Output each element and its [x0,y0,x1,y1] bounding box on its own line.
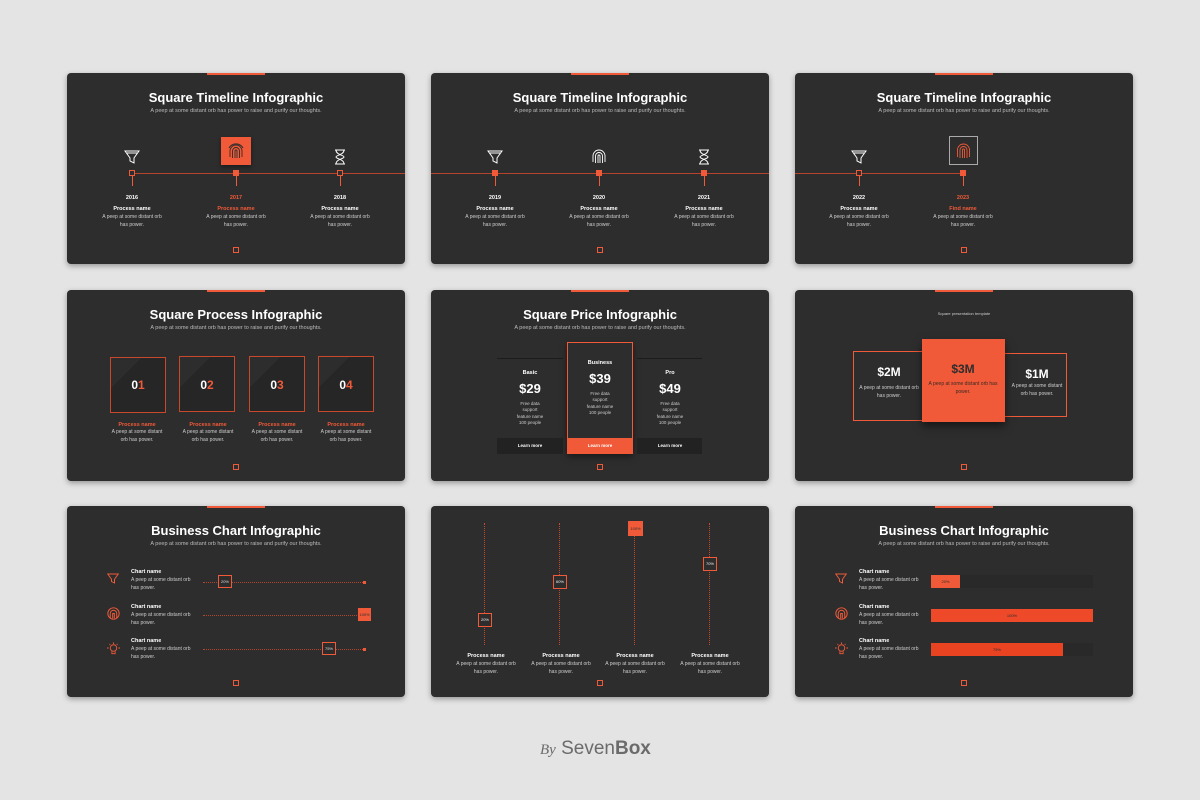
row 2 text: Chart name [859,604,889,610]
subtitle: A peep at some distant orb has power to raise and purify our thoughts. [514,108,686,114]
step 2021: has power. [692,222,716,228]
icon: funnel [487,150,503,164]
plan: basic: Learn more [518,443,542,448]
label 4: has power. [698,668,722,674]
marker 20%: 20% [221,579,229,584]
row 2 text: A peep at some distant orb [131,612,190,618]
label 2: Process name [189,422,227,428]
step 2023: Find name [949,206,977,212]
label 1: A peep at some distant orb [456,661,516,667]
box 03 [249,356,305,412]
step 2016: A peep at some distant orb [102,214,162,220]
step 2021: Process name [685,206,723,212]
step 2021: A peep at some distant orb [674,214,734,220]
label 4: orb has power. [330,436,362,442]
step 2023 [933,195,993,228]
step 2017 [206,195,266,228]
step 2020: has power. [587,222,611,228]
step 2018: 2018 [334,195,346,201]
icon: fingerprint [107,607,120,620]
slide: square price [431,290,769,481]
icon: funnel [107,574,119,584]
plan: basic [497,358,563,455]
icon: funnel [835,574,847,584]
row 1 text [859,569,918,590]
row 3 text: Chart name [131,638,161,644]
step 2016: 2016 [126,195,138,201]
title: Square Process Infographic [150,307,322,322]
label 2 [182,422,234,442]
box 04 [318,356,374,412]
bar 20%: 20% [941,579,950,584]
step 2017: 2017 [230,195,242,201]
label 3 [605,653,665,674]
plan: pro: Learn more [658,443,682,448]
row 2 text [131,604,190,626]
box 03: 03 [270,378,284,392]
box $2M: $2M [877,365,901,379]
box $1M: $1M [1025,367,1049,381]
marker 60%: 60% [556,579,564,584]
label 2: A peep at some distant [183,429,233,435]
box $3M highlighted: A peep at some distant orb has [929,381,997,387]
label 4: Process name [691,653,729,659]
subtitle: A peep at some distant orb has power to raise and purify our thoughts. [150,541,322,547]
box 04: 04 [339,378,353,392]
marker 60% [553,575,567,589]
slide: square values [795,290,1133,481]
box 01: 01 [131,378,145,392]
step 2017: Process name [217,206,255,212]
title: Square Timeline Infographic [877,90,1051,105]
slide: square timeline 3 [795,73,1133,264]
box $2M [853,351,923,421]
box $1M: orb has power. [1021,390,1053,396]
step 2017: A peep at some distant orb [206,214,266,220]
label 1 [112,422,162,442]
row 3 text: has power. [131,654,155,660]
plan: business: Learn more [588,443,612,448]
subtitle: A peep at some distant orb has power to raise and purify our thoughts. [878,541,1050,547]
step 2023: has power. [951,222,975,228]
step 2017: has power. [224,222,248,228]
step 2016: Process name [113,206,151,212]
label 4: A peep at some distant orb [680,661,740,667]
label 3: Process name [616,653,654,659]
marker 20%: 20% [481,617,489,622]
step 2021: 2021 [698,195,710,201]
row 3 text [859,638,918,660]
row 2 text: has power. [859,620,883,626]
label 1: A peep at some distant [112,429,162,435]
label 3: A peep at some distant orb [605,661,665,667]
row 3 text: A peep at some distant orb [859,646,918,652]
plan: basic: support [522,407,538,412]
marker 100% [628,521,643,536]
slide: square timeline 2 [431,73,769,264]
highlighted box: fingerprint [221,137,251,165]
step 2016: has power. [120,222,144,228]
plan: pro: feature name [657,414,683,419]
marker 100% [358,608,371,621]
row 1 text: Chart name [859,569,889,575]
step 2020 [569,195,629,228]
row 3 text: has power. [859,654,883,660]
subtitle: A peep at some distant orb has power to raise and purify our thoughts. [878,108,1050,114]
box $2M: A peep at some distant orb [859,385,919,391]
box $1M: A peep at some distant [1012,383,1062,389]
row 1 text: A peep at some distant orb [859,577,918,583]
bar 75%: 75% [993,647,1001,652]
icon: funnel [851,150,867,164]
label 2: orb has power. [192,436,224,442]
box 02: 02 [200,378,214,392]
plan: business: support [592,397,608,402]
step 2022: A peep at some distant orb [829,214,889,220]
icon: bulb [107,642,120,654]
step 2023: A peep at some distant orb [933,214,993,220]
icon: fingerprint [592,150,606,163]
step 2020: A peep at some distant orb [569,214,629,220]
marker 20% [478,613,492,627]
label 3: has power. [623,668,647,674]
label 1: orb has power. [121,436,153,442]
bar 75% [931,643,1093,656]
plan: basic: feature name [517,414,543,419]
row 2 text: has power. [131,620,155,626]
row 1 text: has power. [859,584,883,590]
plan: basic: 100 people [519,420,541,425]
label 4: A peep at some distant [321,429,371,435]
plan: basic: $29 [519,381,541,396]
row 2 text: Chart name [131,604,161,610]
step 2019 [465,195,525,228]
box $3M highlighted: power. [956,388,970,394]
plan: business: 100 people [589,410,611,415]
step 2019: Process name [476,206,514,212]
marker 100%: 100% [630,526,641,531]
footer: brand: By SevenBox [540,738,651,759]
plan: pro: Pro [665,370,675,376]
step 2016 [102,195,162,228]
step 2018: A peep at some distant orb [310,214,370,220]
marker 70%: 70% [706,561,714,566]
label 1: has power. [474,668,498,674]
step 2023: 2023 [957,195,969,201]
title: Square Price Infographic [523,307,677,322]
bar 100%: 100% [1007,613,1017,618]
row 1 text: Chart name [131,569,161,575]
outlined box: fingerprint [949,136,978,165]
plan: basic: Free data [520,401,540,406]
step 2018: has power. [328,222,352,228]
row 3 text: Chart name [859,638,889,644]
icon: hourglass [335,150,345,164]
label 2: A peep at some distant orb [531,661,591,667]
label 3: orb has power. [261,436,293,442]
marker 70% [703,557,717,571]
plan: pro: $49 [659,381,681,396]
icon: fingerprint [835,607,848,620]
step 2022: has power. [847,222,871,228]
slide: business chart (bars) [795,506,1133,697]
title: Square Timeline Infographic [513,90,687,105]
label 2: has power. [549,668,573,674]
caption: Square presentation template [938,311,990,316]
plan: business: Free data [590,391,610,396]
box $3M highlighted [922,339,1005,422]
box $3M highlighted: $3M [951,362,975,376]
plan: pro [637,358,702,455]
bar 20% [931,575,1093,588]
label 2: Process name [542,653,580,659]
plan: pro: 100 people [659,420,681,425]
label 3 [252,422,302,442]
box $2M: has power. [877,393,901,399]
label 3: A peep at some distant [252,429,302,435]
label 4 [320,422,372,442]
plan: pro: Free data [660,401,680,406]
marker 75%: 75% [325,646,333,651]
subtitle: A peep at some distant orb has power to raise and purify our thoughts. [150,325,322,331]
label 1: Process name [118,422,156,428]
box 02 [179,356,235,412]
row 1 text [131,569,190,590]
slide: vertical chart [431,506,769,697]
label 4 [680,653,740,674]
step 2020: Process name [580,206,618,212]
plan: business: Business [588,360,612,366]
title: Business Chart Infographic [151,523,321,538]
marker 100%: 100% [359,612,370,617]
row 3 text: A peep at some distant orb [131,646,190,652]
label 2 [531,653,591,674]
step 2019: 2019 [489,195,501,201]
marker 20% [218,575,232,588]
slide: square process [67,290,405,481]
icon: hourglass [699,150,709,164]
box 01 [110,357,166,413]
plan: pro: support [662,407,678,412]
row 3 text [131,638,190,660]
plan: business: $39 [589,371,611,386]
step 2022: Process name [840,206,878,212]
step 2021 [674,195,734,228]
step 2019: A peep at some distant orb [465,214,525,220]
subtitle: A peep at some distant orb has power to raise and purify our thoughts. [514,325,686,331]
label 3: Process name [258,422,296,428]
plan: business [567,342,633,454]
row 1 text: A peep at some distant orb [131,577,190,583]
slide: business chart (dotted) [67,506,405,697]
plan: business: feature name [587,404,613,409]
row 1 text: has power. [131,584,155,590]
label 1: Process name [467,653,505,659]
subtitle: A peep at some distant orb has power to raise and purify our thoughts. [150,108,322,114]
step 2020: 2020 [593,195,605,201]
step 2022: 2022 [853,195,865,201]
slide: square timeline 1 [67,73,405,264]
step 2019: has power. [483,222,507,228]
step 2022 [829,195,889,228]
step 2018 [310,195,370,228]
plan: basic: Basic [523,370,537,376]
row 2 text: A peep at some distant orb [859,612,918,618]
title: Square Timeline Infographic [149,90,323,105]
label 1 [456,653,516,674]
row 2 text [859,604,918,626]
bar 100% [931,609,1093,622]
icon: funnel [124,150,140,164]
title: Business Chart Infographic [879,523,1049,538]
box $1M [1003,353,1067,417]
step 2018: Process name [321,206,359,212]
marker 75% [322,642,336,655]
label 4: Process name [327,422,365,428]
icon: bulb [835,642,848,654]
